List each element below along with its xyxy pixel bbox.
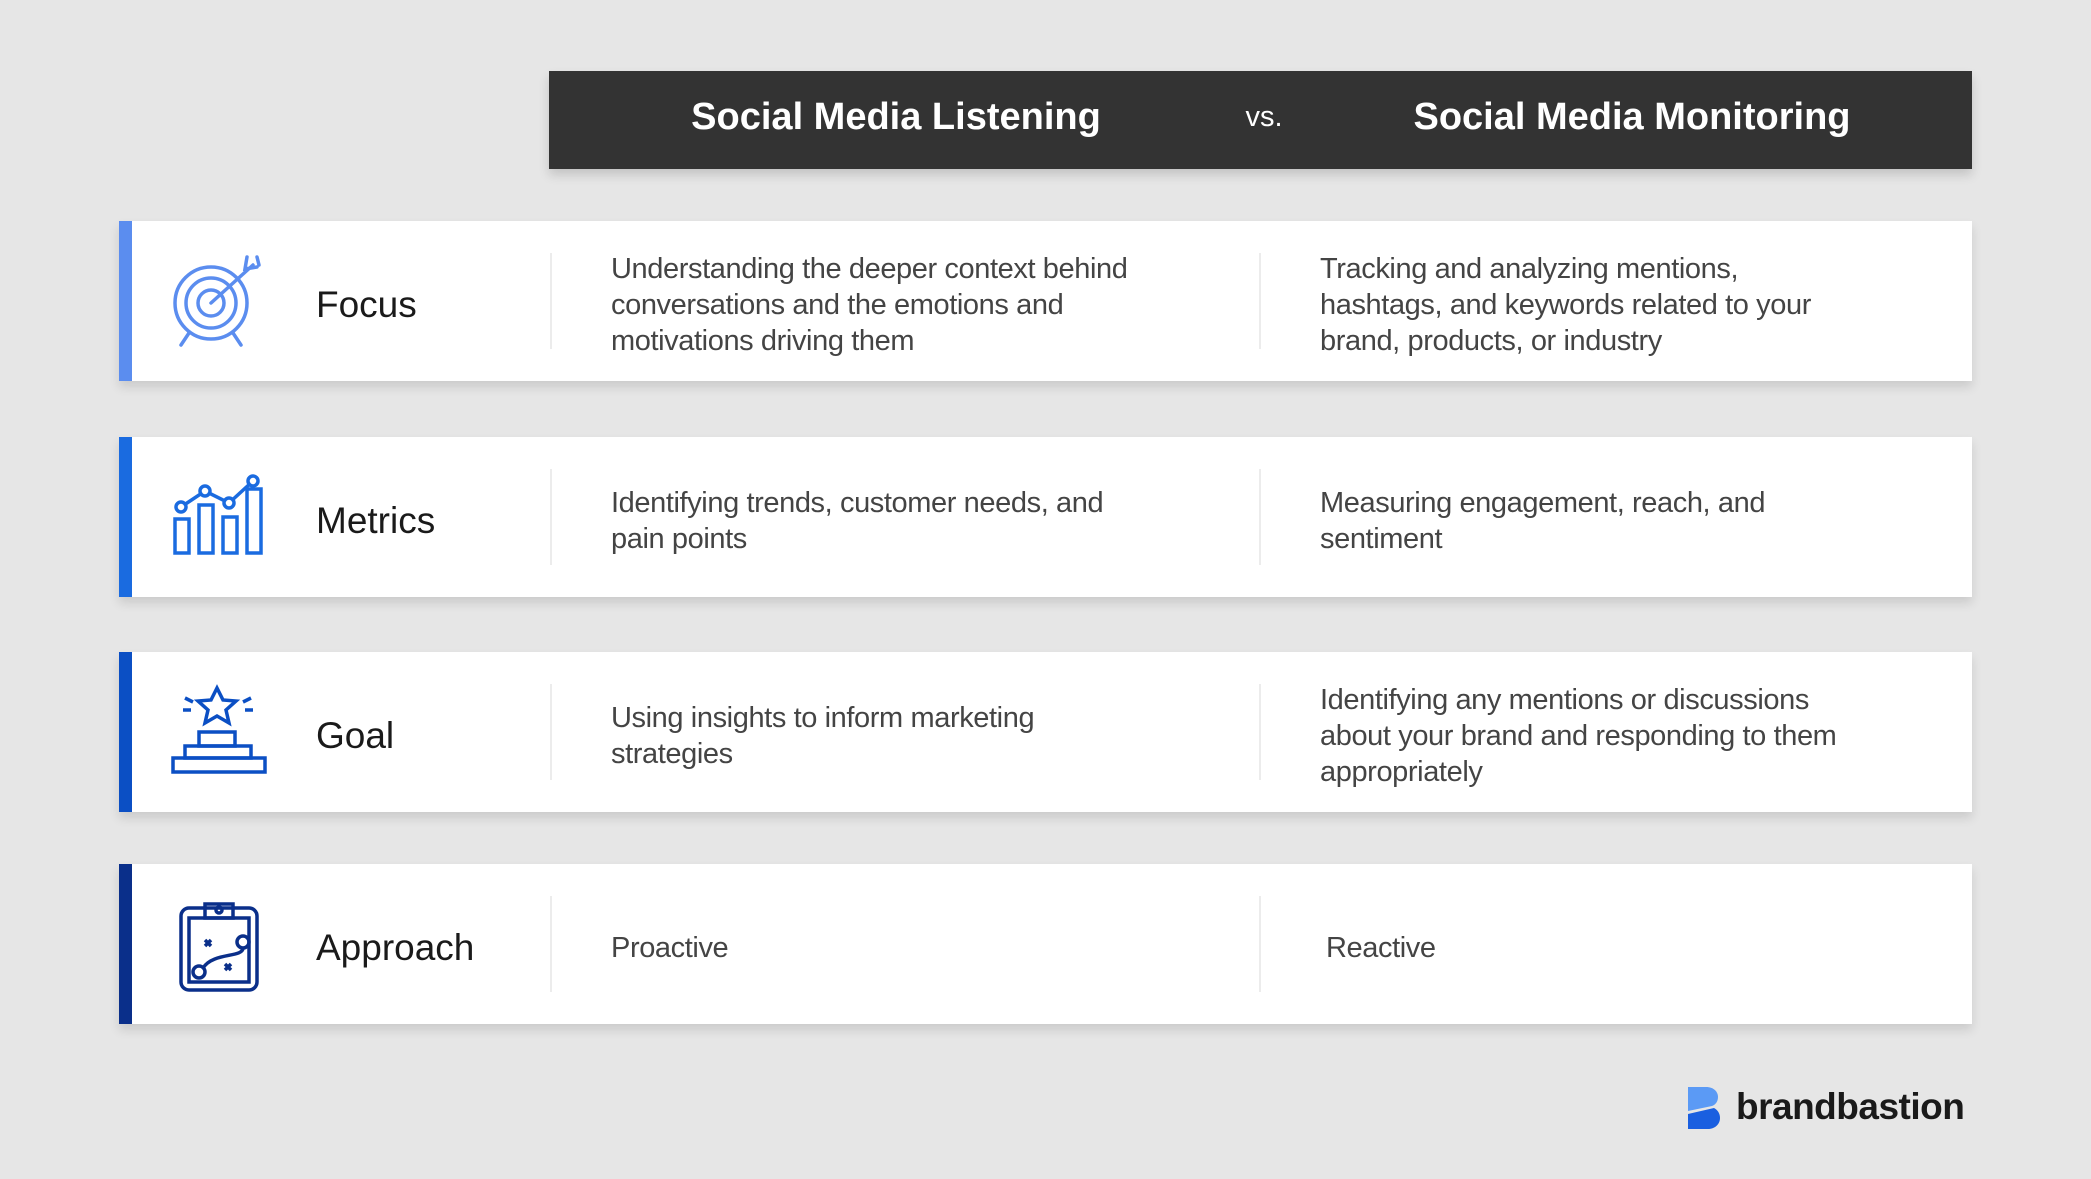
icon: target (173, 255, 261, 347)
text: listening metrics: pain points (611, 523, 747, 555)
text: monitoring focus: brand, products, or industry (1320, 325, 1662, 357)
text: monitoring approach: Reactive (1326, 932, 1436, 964)
text: monitoring metrics: sentiment (1320, 523, 1442, 555)
icon: logo mark (1688, 1087, 1720, 1129)
row: approach (119, 864, 1972, 1024)
text: monitoring metrics: Measuring engagement, reach, and (1320, 487, 1765, 519)
header: listening: Social Media Listening (691, 96, 1101, 138)
text: monitoring goal: Identifying any mentions or discussions (1320, 684, 1809, 716)
text: listening goal (611, 702, 1034, 770)
text: listening focus: conversations and the emotions and (611, 289, 1063, 321)
icon: chart (173, 474, 263, 555)
icon: clipboard (179, 902, 259, 992)
text: listening goal: strategies (611, 738, 733, 770)
text: listening focus (611, 253, 1127, 357)
text: monitoring focus: Tracking and analyzing mentions, (1320, 253, 1738, 285)
text: monitoring focus: hashtags, and keywords related to your (1320, 289, 1811, 321)
text: listening metrics (611, 487, 1103, 555)
text: listening approach: Proactive (611, 932, 728, 964)
row: focus (119, 221, 1972, 381)
text: brandbastion: brandbastion (1736, 1086, 1964, 1127)
header bar (549, 71, 1972, 169)
row: goal (119, 652, 1972, 812)
label: metrics: Metrics (316, 500, 435, 541)
header: vs: vs. (1245, 101, 1283, 133)
text: listening metrics: Identifying trends, customer needs, and (611, 487, 1103, 519)
label: goal: Goal (316, 715, 394, 756)
header: monitoring: Social Media Monitoring (1413, 96, 1851, 138)
icon: podium star (171, 684, 267, 774)
text: monitoring focus (1320, 253, 1811, 357)
text: monitoring goal (1320, 684, 1836, 788)
text: listening focus: Understanding the deeper context behind (611, 253, 1127, 285)
text: listening focus: motivations driving them (611, 325, 914, 357)
label: focus: Focus (316, 284, 417, 325)
text: monitoring goal: appropriately (1320, 756, 1482, 788)
row: metrics (119, 437, 1972, 597)
label: approach: Approach (316, 927, 474, 968)
text: monitoring metrics (1320, 487, 1765, 555)
text: monitoring goal: about your brand and responding to them (1320, 720, 1836, 752)
logo: brandbastion (1688, 1086, 1964, 1129)
text: listening goal: Using insights to inform marketing (611, 702, 1034, 734)
